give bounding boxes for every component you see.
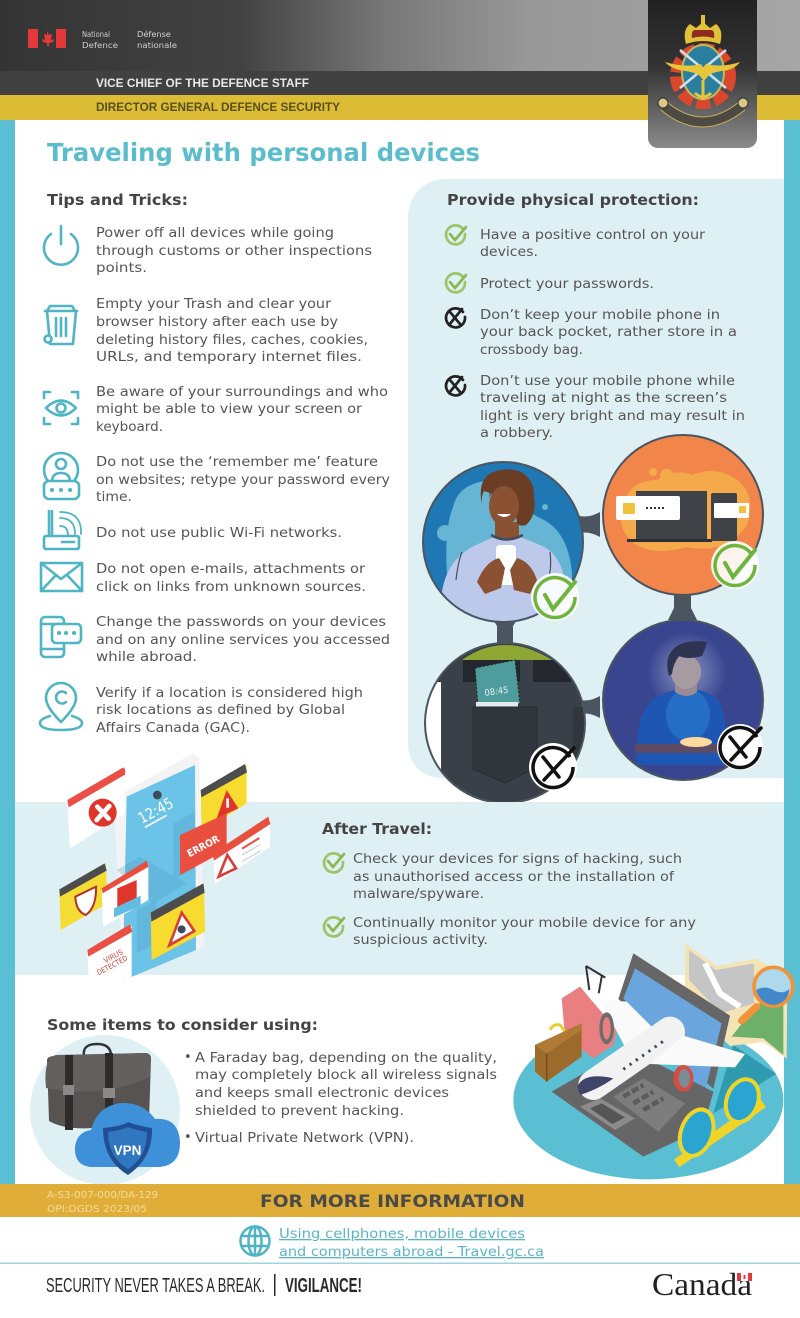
bullet list: shielded to prevent hacking.	[195, 1104, 404, 1119]
illustration: travel laptop	[513, 943, 793, 1179]
text: protect passwords: Protect your passwords.	[480, 277, 654, 292]
VPN cloud	[75, 1103, 180, 1175]
document reference: OPI:DGDS 2023/05	[47, 1204, 147, 1215]
document reference	[47, 1190, 158, 1215]
bullet list: A Faraday bag, depending on the quality,	[195, 1051, 497, 1066]
tip: wifi	[44, 511, 342, 549]
card: virus detected: DETECTED	[95, 953, 129, 977]
header banner	[0, 0, 800, 120]
text: night use	[480, 374, 745, 441]
connectors between circles	[492, 512, 697, 718]
text: passwords	[96, 615, 390, 665]
item: night use	[446, 374, 745, 441]
link block	[240, 1226, 544, 1260]
text: monitor device	[353, 916, 696, 948]
divider	[0, 1262, 800, 1264]
card: error: ERROR	[186, 834, 222, 860]
tip: remember me	[44, 453, 390, 505]
text: power off: through customs or other inspections	[96, 244, 372, 259]
illustration: phone in back pocket	[424, 642, 586, 802]
department name: Defence	[82, 41, 118, 50]
text: monitor device: suspicious activity.	[353, 933, 488, 948]
icon: phone with password	[41, 617, 81, 657]
illustration: hacked phone	[59, 753, 270, 981]
illustration: woman with phone	[422, 461, 584, 623]
heading: physical protection: Provide physical protection:	[447, 191, 699, 209]
bullet list: Virtual Private Network (VPN).	[195, 1131, 414, 1146]
text: surroundings	[96, 385, 388, 435]
text: passwords: and on any online services you accessed	[96, 633, 390, 648]
text: power off	[96, 226, 372, 276]
icon: check	[446, 225, 466, 244]
footer band	[0, 1184, 800, 1217]
card: dollar	[102, 861, 149, 927]
tip: power off	[44, 226, 372, 276]
card: white warning	[213, 817, 270, 884]
banner line 1: VICE CHIEF OF THE DEFENCE STAFF	[96, 76, 309, 90]
heading: items to consider: Some items to consider using:	[47, 1016, 318, 1034]
card: virus detected	[87, 924, 132, 980]
icon: eye	[44, 392, 78, 424]
plane	[577, 1000, 745, 1095]
text: surroundings: might be able to view your screen or	[96, 402, 363, 417]
text: surroundings: keyboard.	[96, 420, 163, 435]
text: remember me: Do not use the ‘remember me’ feature	[96, 455, 378, 470]
icon: check	[324, 917, 344, 936]
briefcase	[535, 1023, 582, 1082]
tip: location	[40, 683, 363, 736]
card: shield alert	[59, 863, 107, 930]
item: monitor device	[324, 916, 696, 948]
tagline: VIGILANCE!	[285, 1275, 362, 1297]
card: red cross alert	[67, 767, 125, 848]
banner line 2: DIRECTOR GENERAL DEFENCE SECURITY	[96, 100, 340, 114]
department name: nationale	[137, 41, 177, 50]
bullet list: may completely block all wireless signals	[195, 1068, 497, 1083]
sunglasses	[674, 1075, 765, 1163]
text: remember me: time.	[96, 490, 132, 505]
badge: night cross	[717, 724, 763, 770]
icon: location pin	[40, 683, 82, 730]
card: big warning	[151, 883, 205, 960]
tip: passwords	[41, 615, 390, 665]
text: positive control: Have a positive control on your	[480, 228, 706, 243]
text: emails: Do not open e-mails, attachments or	[96, 562, 366, 577]
illustration: hacked phone: 12:45	[135, 794, 177, 828]
bullet list: •	[184, 1050, 192, 1065]
text: empty trash: browser history after each use by	[96, 315, 338, 330]
text: empty trash: Empty your Trash and clear your	[96, 297, 332, 312]
text: check for hacking: malware/spyware.	[353, 887, 484, 902]
tip: emails	[41, 562, 366, 595]
panel background	[408, 179, 784, 778]
link text: and computers abroad - Travel.gc.ca	[279, 1245, 544, 1260]
icon: cross	[446, 376, 465, 395]
text: power off: Power off all devices while going	[96, 226, 334, 241]
magnifier	[742, 967, 793, 1021]
map	[685, 943, 787, 1059]
bullet list: •	[184, 1130, 192, 1145]
document reference: A-S3-007-000/DA-129	[47, 1190, 158, 1201]
card: error	[180, 813, 227, 875]
item: protect passwords	[446, 273, 654, 292]
faraday bag	[45, 1044, 151, 1130]
tip: surroundings	[44, 385, 388, 435]
department name: Défense	[137, 29, 171, 39]
badge: devices check	[711, 541, 759, 589]
panel: items to consider	[30, 1016, 497, 1185]
band background	[15, 802, 784, 975]
illustration: man using phone at night	[602, 620, 764, 781]
icon: envelope	[41, 563, 82, 591]
icon: check	[446, 273, 466, 292]
illustration: faraday bag and VPN	[30, 1035, 180, 1185]
text: location: Affairs Canada (GAC).	[96, 721, 250, 736]
Canada wordmark: Canada	[652, 1266, 752, 1302]
VPN cloud: VPN	[114, 1143, 141, 1158]
heading: tips and tricks: Tips and Tricks:	[47, 191, 188, 209]
heading: for more information: FOR MORE INFORMATION	[260, 1192, 525, 1212]
icon: Canadian flag	[28, 29, 66, 48]
text: night use: light is very bright and may result in	[480, 409, 745, 424]
card: yellow warning	[201, 764, 247, 832]
panel: tips and tricks	[40, 191, 390, 736]
text: passwords: while abroad.	[96, 650, 197, 665]
panel: provide physical protection	[408, 179, 784, 810]
text: night use: Don’t use your mobile phone while	[480, 374, 735, 389]
text: check for hacking: as unauthorised access or the installation of	[353, 870, 674, 885]
text: empty trash: URLs, and temporary internet files.	[96, 350, 362, 365]
tip: empty trash	[44, 297, 368, 365]
icon: trash	[44, 306, 77, 344]
badge: woman check	[531, 573, 579, 621]
badge: pocket cross	[529, 743, 577, 791]
illustration: phone in back pocket: 08:45	[484, 686, 509, 699]
laptop	[552, 953, 730, 1157]
text: remember me: on websites; retype your password every	[96, 473, 390, 488]
bullet list: and keeps small electronic devices	[195, 1086, 449, 1101]
card: virus detected: VIRUS	[102, 947, 125, 965]
icon: globe	[240, 1226, 270, 1256]
item: back pocket	[446, 308, 737, 358]
text: passwords: Change the passwords on your devices	[96, 615, 386, 630]
text: empty trash	[96, 297, 368, 365]
text: location: risk locations as defined by Global	[96, 703, 345, 718]
link text	[279, 1227, 544, 1260]
text: check for hacking	[353, 852, 682, 902]
department name	[82, 29, 177, 50]
item: positive control	[446, 225, 706, 260]
link text: Using cellphones, mobile devices	[279, 1227, 525, 1242]
icon: cross	[446, 308, 465, 327]
text: back pocket: Don’t keep your mobile phone in	[480, 308, 720, 323]
text: positive control	[480, 228, 706, 260]
text: location: Verify if a location is considered high	[96, 686, 363, 701]
icon: user password	[44, 453, 79, 499]
text: emails: click on links from unknown sources.	[96, 580, 366, 595]
text: check for hacking: Check your devices for signs of hacking, such	[353, 852, 682, 867]
icon: router	[44, 511, 81, 549]
text: wifi: Do not use public Wi-Fi networks.	[96, 526, 342, 541]
text: monitor device: Continually monitor your mobile device for any	[353, 916, 696, 931]
item: check for hacking	[324, 852, 682, 902]
icon: check	[324, 853, 344, 872]
tagline: SECURITY NEVER TAKES A BREAK.	[46, 1275, 265, 1297]
illustration: laptop with passwords	[600, 430, 770, 600]
text: empty trash: deleting history files, caches, cookies,	[96, 333, 368, 348]
text: back pocket	[480, 308, 737, 358]
text: back pocket: crossbody bag.	[480, 343, 583, 358]
bullet list	[184, 1050, 497, 1146]
text: emails	[96, 562, 366, 595]
text: night use: a robbery.	[480, 426, 553, 441]
text: power off: points.	[96, 261, 147, 276]
icon: power	[44, 226, 78, 265]
crest tab	[648, 0, 757, 148]
text: night use: traveling at night as the screen’s	[480, 391, 727, 406]
panel: after travel	[15, 753, 784, 981]
text: surroundings: Be aware of your surroundings and who	[96, 385, 388, 400]
text: positive control: devices.	[480, 245, 538, 260]
icon: crest	[658, 15, 748, 122]
suitcase	[562, 966, 617, 1058]
text: remember me	[96, 455, 390, 505]
department name: National	[82, 30, 110, 39]
text: location	[96, 686, 363, 736]
heading: after travel: After Travel:	[322, 820, 432, 838]
title: Traveling with personal devices	[47, 138, 480, 167]
text: back pocket: your back pocket, rather store in a	[480, 325, 737, 340]
